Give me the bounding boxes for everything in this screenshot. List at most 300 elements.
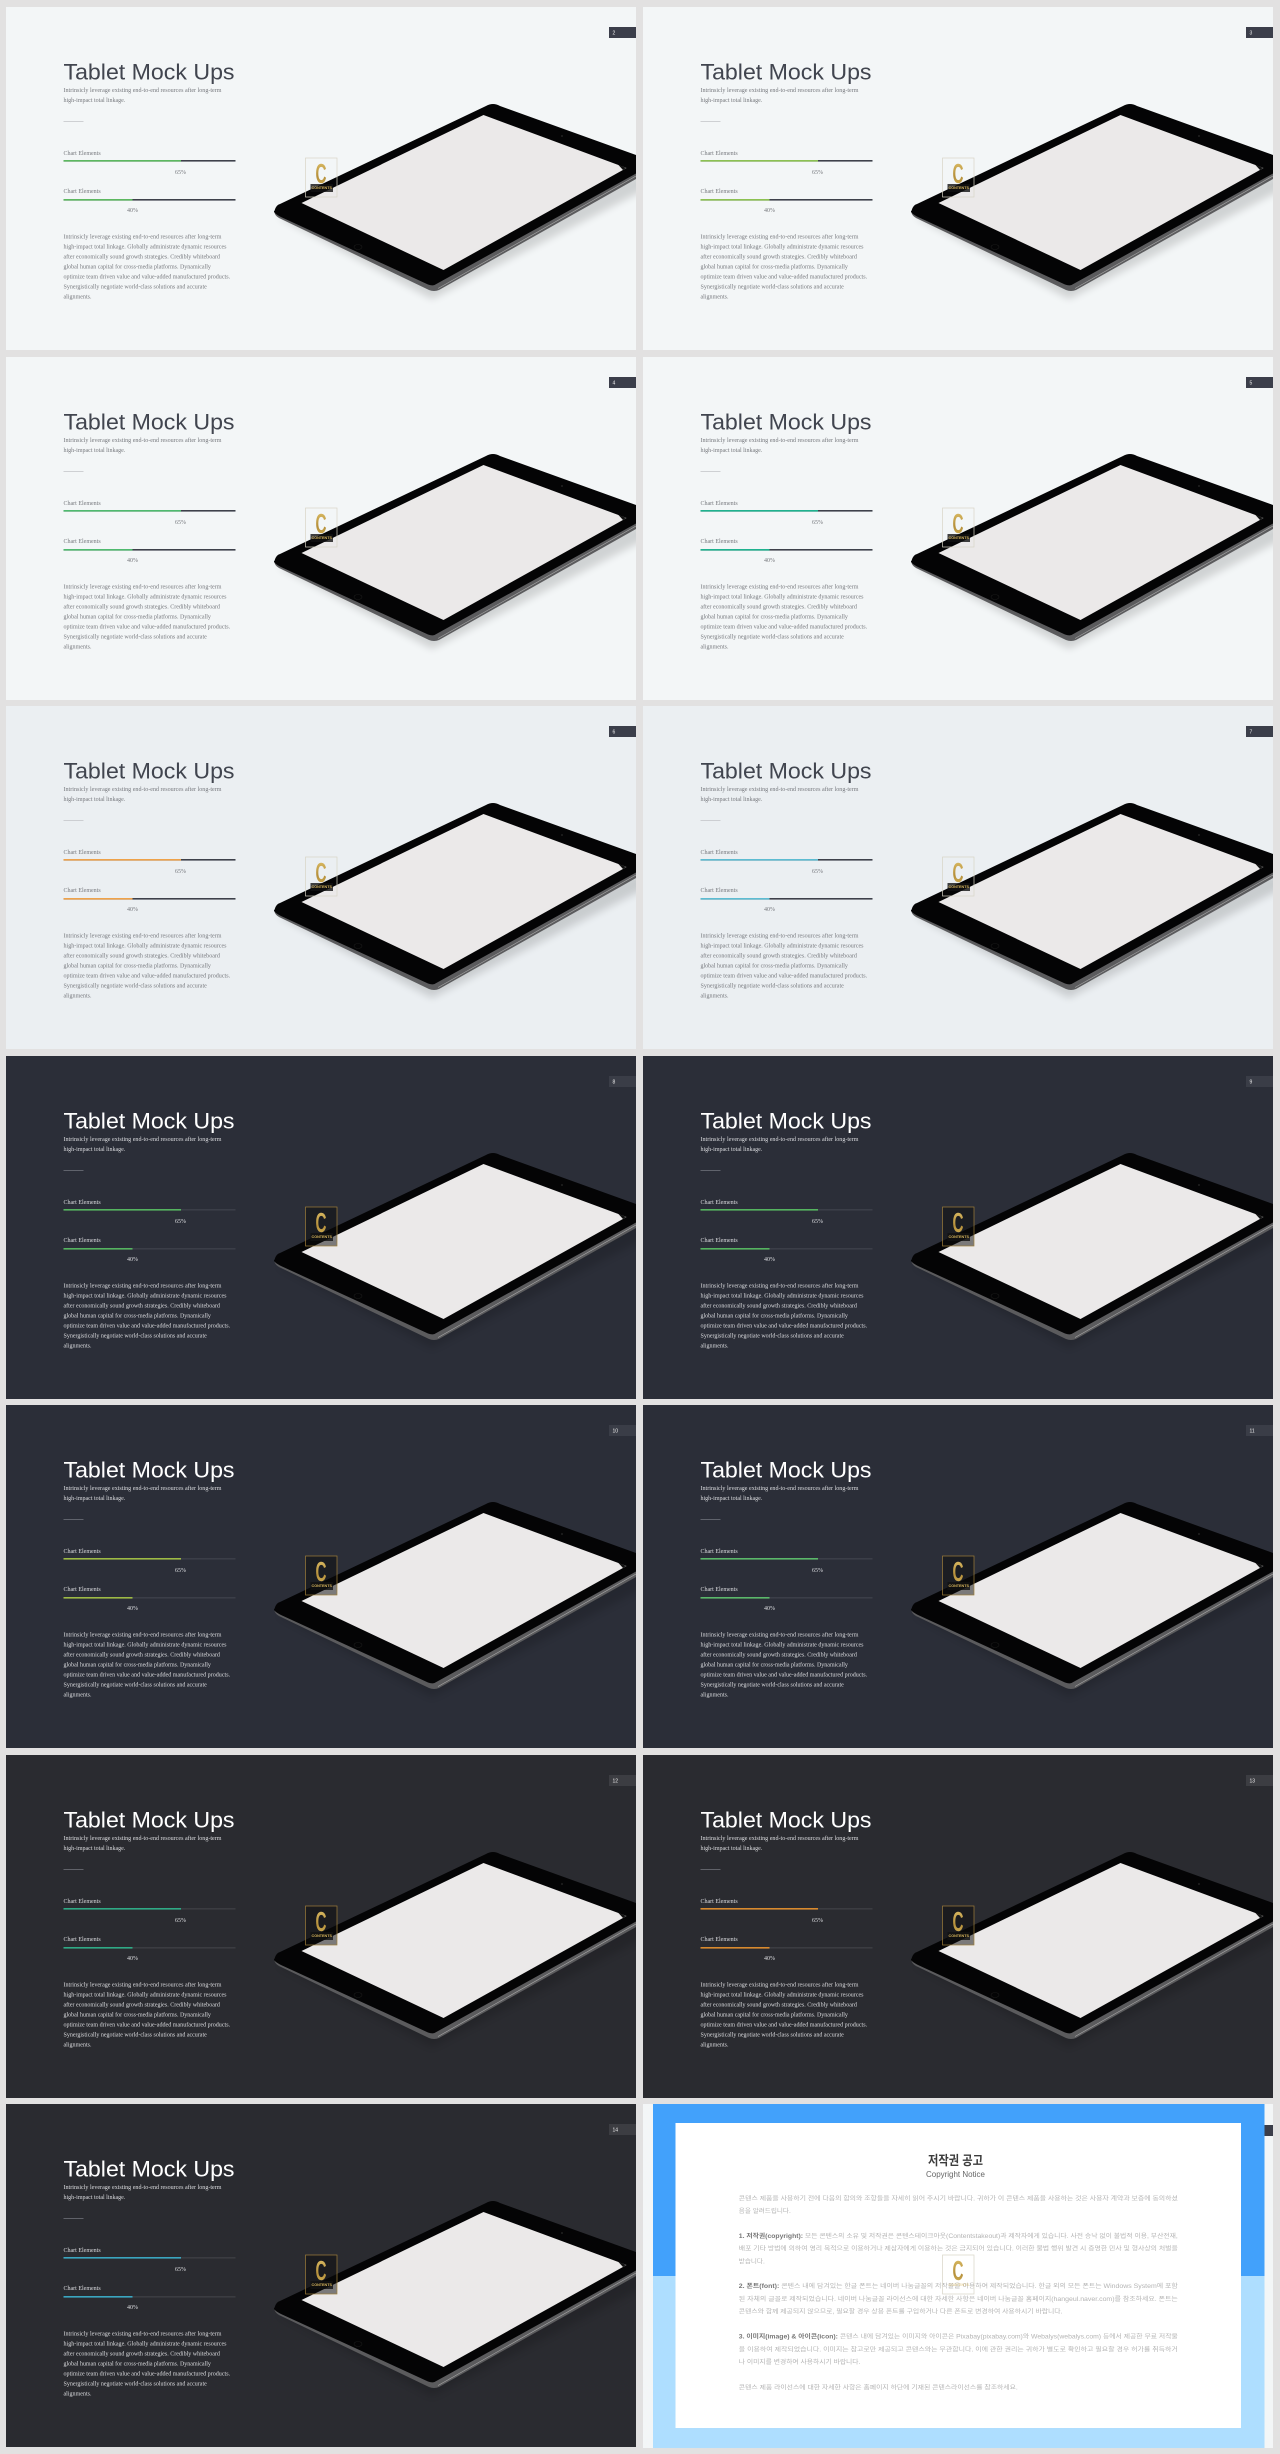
body text: global human capital for cross-media platforms. Dynamically [64, 2361, 211, 2368]
watermark logo: C [952, 508, 964, 539]
body text [64, 584, 231, 650]
title: Tablet Mock Ups [64, 2156, 234, 2182]
bar chart: 40%: 40% [764, 208, 775, 214]
subtitle [64, 1835, 222, 1852]
slide 7: light, blue bars [643, 706, 1273, 1049]
subtitle: Intrinsicly leverage existing end-to-end resources after long-term [700, 1485, 859, 1492]
watermark logo: C [316, 1906, 326, 1937]
page tab: 7 [1250, 730, 1252, 736]
subtitle: Intrinsicly leverage existing end-to-end resources after long-term [700, 437, 859, 444]
body text: Intrinsicly leverage existing end-to-end resources after long-term [64, 234, 222, 241]
intro paragraph: 콘텐스 제품을 사용하기 전에 다음의 합의와 조항들을 자세히 읽어 주시기 바랍니다. 귀하가 이 콘텐스 제품을 사용하는 것은 사용자 계약과 보증에 동의하셨 [739, 2195, 1178, 2203]
intro paragraph: 음을 알려드립니다. [739, 2207, 791, 2215]
body text: Intrinsicly leverage existing end-to-end resources after long-term [700, 933, 859, 940]
slide: copyright notice [643, 2104, 1273, 2448]
bar chart: 65% [700, 1899, 872, 1924]
body text: alignments. [64, 294, 92, 300]
watermark logo: CONTENTS [312, 2283, 333, 2287]
bar chart: 65%: 65% [175, 1918, 186, 1924]
page tab: 14 [612, 2128, 618, 2134]
watermark logo: C [952, 1207, 964, 1238]
body text: Synergistically negotiate world-class solutions and accurate [700, 1333, 844, 1339]
body text: optimize team driven value and value-added manufactured products. [64, 273, 231, 280]
watermark logo: CONTENTS [312, 1235, 333, 1239]
body text: high-impact total linkage. Globally administrate dynamic resources [700, 1294, 864, 1300]
body text: global human capital for cross-media platforms. Dynamically [64, 2012, 211, 2019]
bar chart: 40%: 40% [764, 1956, 775, 1962]
bar chart: 40%: 40% [764, 1257, 775, 1263]
body text: after economically sound growth strategies. Credibly whiteboard [700, 1652, 857, 1659]
title: Tablet Mock Ups [700, 1108, 872, 1134]
title: Tablet Mock Ups [700, 410, 872, 434]
subtitle: Intrinsicly leverage existing end-to-end resources after long-term [64, 2184, 222, 2191]
body text [700, 1283, 868, 1349]
body text: alignments. [64, 1692, 92, 1698]
icon: tablet [274, 1502, 646, 1697]
body text [64, 1632, 231, 1698]
bar chart: 65% [64, 1200, 236, 1225]
body text [700, 1632, 868, 1698]
bar chart: 65%: Chart Elements [64, 151, 101, 157]
subtitle: high-impact total linkage. [700, 98, 763, 104]
bar chart: 65%: Chart Elements [64, 1200, 101, 1206]
body text: global human capital for cross-media platforms. Dynamically [700, 963, 848, 970]
body text: high-impact total linkage. Globally administrate dynamic resources [700, 595, 864, 601]
subtitle: high-impact total linkage. [64, 1846, 126, 1852]
icon: tablet [274, 1852, 646, 2047]
heading: 저작권 공고 [928, 2153, 983, 2168]
subtitle: Intrinsicly leverage existing end-to-end resources after long-term [64, 1136, 222, 1143]
body text: Intrinsicly leverage existing end-to-end resources after long-term [64, 1982, 222, 1989]
white card [676, 2123, 1241, 2428]
watermark logo: CONTENTS [312, 885, 333, 889]
bar chart: 40%: 40% [127, 1257, 138, 1263]
slide 4: light, green bars [6, 357, 636, 700]
subtitle: high-impact total linkage. [64, 1147, 126, 1153]
bar chart: 40%: Chart Elements [64, 1587, 101, 1593]
body text: optimize team driven value and value-added manufactured products. [64, 2021, 231, 2028]
bar chart: 40% [700, 1587, 872, 1612]
page tab [1246, 726, 1273, 737]
subtitle: Intrinsicly leverage existing end-to-end resources after long-term [64, 1485, 222, 1492]
body text: Intrinsicly leverage existing end-to-end resources after long-term [700, 1632, 859, 1639]
subtitle: high-impact total linkage. [64, 1496, 126, 1502]
page tab: 6 [612, 730, 616, 736]
section 1: copyright: 받습니다. [739, 2257, 765, 2265]
watermark logo [942, 1906, 974, 1945]
subtitle [700, 1835, 859, 1852]
body text: high-impact total linkage. Globally administrate dynamic resources [64, 944, 227, 950]
body text: global human capital for cross-media platforms. Dynamically [700, 264, 848, 271]
bar chart: 65% [700, 850, 872, 875]
body text: optimize team driven value and value-added manufactured products. [700, 2021, 868, 2028]
body text: alignments. [700, 294, 729, 300]
bar chart: 40%: Chart Elements [700, 1587, 738, 1593]
subtitle: Intrinsicly leverage existing end-to-end resources after long-term [700, 1835, 859, 1842]
slide 13: charcoal, orange bars [643, 1755, 1273, 2098]
subtitle: Intrinsicly leverage existing end-to-end resources after long-term [64, 87, 222, 94]
blue backdrop [653, 2104, 1264, 2448]
bar chart: 65%: 65% [812, 1219, 823, 1225]
body text: alignments. [700, 993, 729, 999]
body text: Synergistically negotiate world-class solutions and accurate [64, 983, 207, 989]
body text: after economically sound growth strategies. Credibly whiteboard [700, 1303, 857, 1310]
bar chart: 40%: 40% [764, 558, 775, 564]
bar chart: 65%: 65% [175, 2267, 186, 2273]
bar chart: 40%: Chart Elements [700, 539, 738, 545]
body text: global human capital for cross-media platforms. Dynamically [64, 264, 211, 271]
icon: tablet [911, 1153, 1280, 1348]
icon: tablet [274, 2201, 646, 2396]
bar chart: 40% [64, 1587, 236, 1612]
bar chart: 65% [64, 2248, 236, 2273]
bar chart: 40% [700, 1937, 872, 1962]
body text [700, 1982, 868, 2048]
body text: Intrinsicly leverage existing end-to-end resources after long-term [64, 1632, 222, 1639]
icon: tablet [274, 454, 646, 649]
bar chart: 65%: 65% [812, 1568, 823, 1574]
watermark logo: CONTENTS [948, 186, 970, 190]
page tab: 11 [1250, 1428, 1255, 1434]
subtitle [64, 1485, 222, 1502]
body text: after economically sound growth strategies. Credibly whiteboard [64, 2002, 220, 2009]
subtitle: high-impact total linkage. [64, 98, 126, 104]
watermark logo: C [316, 1207, 326, 1238]
body text [64, 2331, 231, 2397]
body text [64, 1982, 231, 2048]
body text: alignments. [700, 644, 729, 650]
bar chart: 40%: Chart Elements [64, 2286, 101, 2292]
body text: alignments. [64, 993, 92, 999]
subtitle: high-impact total linkage. [700, 1147, 763, 1153]
body text: optimize team driven value and value-added manufactured products. [700, 623, 868, 630]
page tab [609, 27, 636, 38]
icon: tablet [911, 803, 1280, 998]
bar chart: 65%: 65% [175, 170, 186, 176]
watermark logo: C [952, 2255, 964, 2286]
subtitle [700, 1485, 859, 1502]
page tab: 3 [1250, 30, 1252, 36]
body text: optimize team driven value and value-added manufactured products. [700, 972, 868, 979]
slide 3: light, lime bars [643, 7, 1273, 350]
body text: alignments. [64, 644, 92, 650]
watermark logo: C [316, 857, 326, 888]
body text: high-impact total linkage. Globally administrate dynamic resources [700, 1643, 864, 1649]
bar chart: 65% [700, 151, 872, 176]
icon: tablet [911, 1502, 1280, 1697]
page tab: 13 [1250, 1778, 1255, 1784]
watermark logo: C [316, 508, 326, 539]
icon: tablet [274, 803, 646, 998]
page tab [1246, 1425, 1273, 1436]
body text: Synergistically negotiate world-class solutions and accurate [64, 1333, 207, 1339]
section 1: copyright: 배포 기타 방법에 의하여 영리 목적으로 이용하거나 제삼자에게 이용하는 것은 금지되어 있습니다. 이러한 불법 행위 발견 시 증명한 민사 및 형사상의 처벌을 [739, 2245, 1178, 2253]
section 2: font: 된 자체의 글꼴로 제작되었습니다. 네이버 나눔글꼴 라이선스에 대한 자세한 사항은 네이버 나눔글꼴 홈페이지(hangeul.naver.com)를 참조하세요. 폰트는 [739, 2295, 1178, 2303]
body text: after economically sound growth strategies. Credibly whiteboard [64, 953, 220, 960]
subtitle: high-impact total linkage. [700, 1846, 763, 1852]
page tab: 10 [612, 1428, 618, 1434]
bar chart: 65%: Chart Elements [700, 501, 738, 507]
section 3: image and icon: 을 이용하여 제작되었습니다. 이미지는 참고로만 제공되고 콘텐스와는 무관합니다. 이에 관한 권리는 귀하가 별도로 확인하고 필요할 경우 허가를 취득하거 [739, 2345, 1178, 2353]
body text: high-impact total linkage. Globally administrate dynamic resources [64, 1993, 227, 1999]
bar chart: 40% [64, 1238, 236, 1263]
bar chart: 65%: 65% [175, 869, 186, 875]
title: Tablet Mock Ups [64, 1458, 234, 1482]
bar chart: 40% [64, 189, 236, 214]
bar chart: 65%: 65% [812, 1918, 823, 1924]
body text: global human capital for cross-media platforms. Dynamically [700, 1662, 848, 1669]
body text: after economically sound growth strategies. Credibly whiteboard [64, 254, 220, 261]
watermark logo: CONTENTS [948, 536, 970, 540]
body text: high-impact total linkage. Globally administrate dynamic resources [64, 1294, 227, 1300]
bar chart: 40%: Chart Elements [700, 189, 738, 195]
subtitle: Intrinsicly leverage existing end-to-end resources after long-term [64, 437, 222, 444]
bar chart: 65% [700, 1549, 872, 1574]
bar chart: 65% [64, 1899, 236, 1924]
bar chart: 40%: Chart Elements [64, 1238, 101, 1244]
subtitle: high-impact total linkage. [64, 797, 126, 803]
slide 5: light, teal bars [643, 357, 1273, 700]
bar chart: 65%: Chart Elements [700, 850, 738, 856]
bar chart: 40%: 40% [764, 907, 775, 913]
bar chart: 40%: 40% [127, 2305, 138, 2311]
body text: optimize team driven value and value-added manufactured products. [64, 1322, 231, 1329]
title: Tablet Mock Ups [700, 60, 872, 84]
body text: after economically sound growth strategies. Credibly whiteboard [700, 254, 857, 261]
subtitle [64, 437, 222, 454]
bar chart: 65% [64, 1549, 236, 1574]
watermark logo [942, 1207, 974, 1246]
bar chart: 65%: 65% [175, 1219, 186, 1225]
title: Tablet Mock Ups [64, 410, 234, 434]
watermark logo [306, 2255, 337, 2294]
watermark logo: CONTENTS [312, 1584, 333, 1588]
body text: Intrinsicly leverage existing end-to-end resources after long-term [64, 933, 222, 940]
slide 6: light, orange bars [6, 706, 636, 1049]
intro paragraph [739, 2195, 1178, 2215]
subtitle: high-impact total linkage. [700, 448, 763, 454]
bar chart: 40%: 40% [127, 558, 138, 564]
page tab [609, 377, 636, 388]
body text: Synergistically negotiate world-class solutions and accurate [64, 2032, 207, 2038]
bar chart: 65%: 65% [175, 1568, 186, 1574]
subtitle: Intrinsicly leverage existing end-to-end resources after long-term [700, 87, 859, 94]
body text: global human capital for cross-media platforms. Dynamically [64, 963, 211, 970]
body text: Synergistically negotiate world-class solutions and accurate [64, 1682, 207, 1688]
watermark logo [942, 158, 974, 197]
section 3: image and icon: 3. 이미지(image) & 아이콘(icon): 콘텐스 내에 담겨있는 이미지와 아이콘은 Pixabay(pixabay.com)와 Webalys(webalys.com) 등에서 제공한 무료 저작물 [739, 2333, 1178, 2341]
body text: optimize team driven value and value-added manufactured products. [700, 1322, 868, 1329]
page tab [1264, 2125, 1273, 2136]
bar chart: 65%: Chart Elements [64, 2248, 101, 2254]
body text: after economically sound growth strategies. Credibly whiteboard [64, 1652, 220, 1659]
body text: Intrinsicly leverage existing end-to-end resources after long-term [700, 1283, 859, 1290]
watermark logo: C [316, 1556, 326, 1587]
body text [64, 1283, 231, 1349]
slide 8: dark, green bars [6, 1056, 636, 1399]
closing note: 콘텐스 제품 라이선스에 대한 자세한 사항은 홈페이지 하단에 기재된 콘텐스라이선스를 참조하세요. [739, 2383, 1018, 2391]
watermark logo [942, 857, 974, 896]
subtitle: high-impact total linkage. [64, 2195, 126, 2201]
page tab [1246, 1076, 1273, 1087]
bar chart: 40%: Chart Elements [64, 189, 101, 195]
page tab [609, 726, 636, 737]
watermark logo: CONTENTS [948, 1235, 970, 1239]
body text: global human capital for cross-media platforms. Dynamically [64, 1313, 211, 1320]
page tab [1246, 1775, 1273, 1786]
body text: Intrinsicly leverage existing end-to-end resources after long-term [64, 584, 222, 591]
subtitle [64, 87, 222, 104]
body text: high-impact total linkage. Globally administrate dynamic resources [700, 245, 864, 251]
bar chart: 40% [700, 539, 872, 564]
title: Tablet Mock Ups [700, 758, 872, 784]
body text: Synergistically negotiate world-class solutions and accurate [700, 284, 844, 290]
page tab: 9 [1250, 1080, 1252, 1086]
body text: Intrinsicly leverage existing end-to-end resources after long-term [700, 234, 859, 241]
bar chart: 40%: Chart Elements [64, 539, 101, 545]
subtitle [64, 1136, 222, 1153]
page tab [1246, 377, 1273, 388]
subtitle [700, 786, 859, 803]
body text: alignments. [700, 1343, 729, 1349]
body text: after economically sound growth strategies. Credibly whiteboard [700, 2002, 857, 2009]
title: Tablet Mock Ups [64, 1108, 234, 1134]
bar chart: 40% [700, 1238, 872, 1263]
bar chart: 65% [64, 501, 236, 526]
body text: after economically sound growth strategies. Credibly whiteboard [64, 2351, 220, 2358]
page tab: 5 [1250, 380, 1252, 386]
body text: high-impact total linkage. Globally administrate dynamic resources [64, 2342, 227, 2348]
bar chart: 65%: Chart Elements [64, 850, 101, 856]
bar chart: 65%: Chart Elements [700, 1549, 738, 1555]
bar chart: 40% [64, 888, 236, 913]
section 2: font [739, 2282, 1178, 2316]
body text: optimize team driven value and value-added manufactured products. [700, 273, 868, 280]
body text: Synergistically negotiate world-class solutions and accurate [700, 634, 844, 640]
icon: tablet [911, 454, 1280, 649]
body text: alignments. [64, 1343, 92, 1349]
page tab [609, 1775, 636, 1786]
watermark logo: C [316, 158, 326, 189]
bar chart: 40% [64, 539, 236, 564]
bar chart: 40%: 40% [764, 1606, 775, 1612]
bar chart: 65%: Chart Elements [64, 1899, 101, 1905]
bar chart: 40%: 40% [127, 1606, 138, 1612]
body text [64, 933, 231, 999]
title: Tablet Mock Ups [64, 758, 234, 784]
subtitle [700, 87, 859, 104]
body text: after economically sound growth strategies. Credibly whiteboard [64, 604, 220, 611]
bar chart: 40%: 40% [127, 1956, 138, 1962]
watermark logo [306, 1906, 337, 1945]
page tab [609, 2124, 636, 2135]
body text: optimize team driven value and value-added manufactured products. [64, 2370, 231, 2377]
page tab [1246, 27, 1273, 38]
subtitle: Intrinsicly leverage existing end-to-end resources after long-term [700, 1136, 859, 1143]
title: Tablet Mock Ups [700, 1458, 872, 1482]
subtitle [700, 1136, 859, 1153]
page tab: 12 [612, 1778, 618, 1784]
bar chart: 65%: 65% [175, 520, 186, 526]
bar chart: 40%: 40% [127, 907, 138, 913]
body text: alignments. [64, 2391, 92, 2397]
body text: Synergistically negotiate world-class solutions and accurate [64, 634, 207, 640]
watermark logo: C [952, 857, 964, 888]
body text [64, 234, 231, 300]
bar chart: 40% [700, 888, 872, 913]
body text: Intrinsicly leverage existing end-to-end resources after long-term [700, 1982, 859, 1989]
body text: after economically sound growth strategies. Credibly whiteboard [700, 604, 857, 611]
bar chart: 65% [64, 850, 236, 875]
body text: Intrinsicly leverage existing end-to-end resources after long-term [64, 2331, 222, 2338]
body text: optimize team driven value and value-added manufactured products. [700, 1671, 868, 1678]
bar chart: 65%: Chart Elements [64, 1549, 101, 1555]
body text: Intrinsicly leverage existing end-to-end resources after long-term [700, 584, 859, 591]
body text: global human capital for cross-media platforms. Dynamically [700, 2012, 848, 2019]
watermark logo [942, 2255, 974, 2294]
slide 11: dark, green bars [643, 1405, 1273, 1748]
bar chart: 40%: Chart Elements [700, 1238, 738, 1244]
body text: Synergistically negotiate world-class solutions and accurate [700, 1682, 844, 1688]
body text: high-impact total linkage. Globally administrate dynamic resources [64, 1643, 227, 1649]
watermark logo [306, 508, 337, 547]
icon: tablet [274, 1153, 646, 1348]
section 2: font: 콘텐스와 함께 제공되지 않으므로, 필요할 경우 상용 폰트를 구입하거나 다른 폰트로 변경하여 사용하시기 바랍니다. [739, 2308, 1063, 2316]
watermark logo: CONTENTS [312, 1934, 333, 1938]
subtitle: Intrinsicly leverage existing end-to-end resources after long-term [64, 1835, 222, 1842]
watermark logo: CONTENTS [948, 1934, 970, 1938]
body text: global human capital for cross-media platforms. Dynamically [64, 614, 211, 621]
bar chart: 65%: 65% [812, 520, 823, 526]
body text: Synergistically negotiate world-class solutions and accurate [64, 284, 207, 290]
bar chart: 65%: Chart Elements [700, 1200, 738, 1206]
icon: tablet [274, 104, 646, 299]
body text: high-impact total linkage. Globally administrate dynamic resources [700, 1993, 864, 1999]
subtitle: Intrinsicly leverage existing end-to-end resources after long-term [64, 786, 222, 793]
watermark logo [942, 1556, 974, 1595]
bar chart: 40%: 40% [127, 208, 138, 214]
page tab: 2 [612, 30, 616, 36]
title: Tablet Mock Ups [700, 1808, 872, 1832]
body text: high-impact total linkage. Globally administrate dynamic resources [64, 245, 227, 251]
page tab: 8 [612, 1080, 616, 1086]
icon: tablet [911, 104, 1280, 299]
page tab: 4 [612, 380, 616, 386]
body text: after economically sound growth strategies. Credibly whiteboard [700, 953, 857, 960]
watermark logo: CONTENTS [948, 1584, 970, 1588]
watermark logo: C [952, 1906, 964, 1937]
section 3: image and icon [739, 2333, 1178, 2366]
body text: Intrinsicly leverage existing end-to-end resources after long-term [64, 1283, 222, 1290]
body text: Synergistically negotiate world-class solutions and accurate [64, 2381, 207, 2387]
slide 10: dark, olive bars [6, 1405, 636, 1748]
watermark logo: CONTENTS [312, 536, 333, 540]
slide 2: light, green bars [6, 7, 636, 350]
subtitle: Intrinsicly leverage existing end-to-end resources after long-term [700, 786, 859, 793]
subtitle: high-impact total linkage. [700, 797, 763, 803]
watermark logo: C [316, 2255, 326, 2286]
slide 12: charcoal, teal bars [6, 1755, 636, 2098]
watermark logo [306, 1556, 337, 1595]
body text: alignments. [700, 2042, 729, 2048]
subheading: Copyright Notice [926, 2169, 985, 2179]
subtitle: high-impact total linkage. [64, 448, 126, 454]
body text: high-impact total linkage. Globally administrate dynamic resources [64, 595, 227, 601]
body text: alignments. [64, 2042, 92, 2048]
body text: optimize team driven value and value-added manufactured products. [64, 1671, 231, 1678]
body text: Synergistically negotiate world-class solutions and accurate [700, 2032, 844, 2038]
bar chart: 65%: Chart Elements [64, 501, 101, 507]
